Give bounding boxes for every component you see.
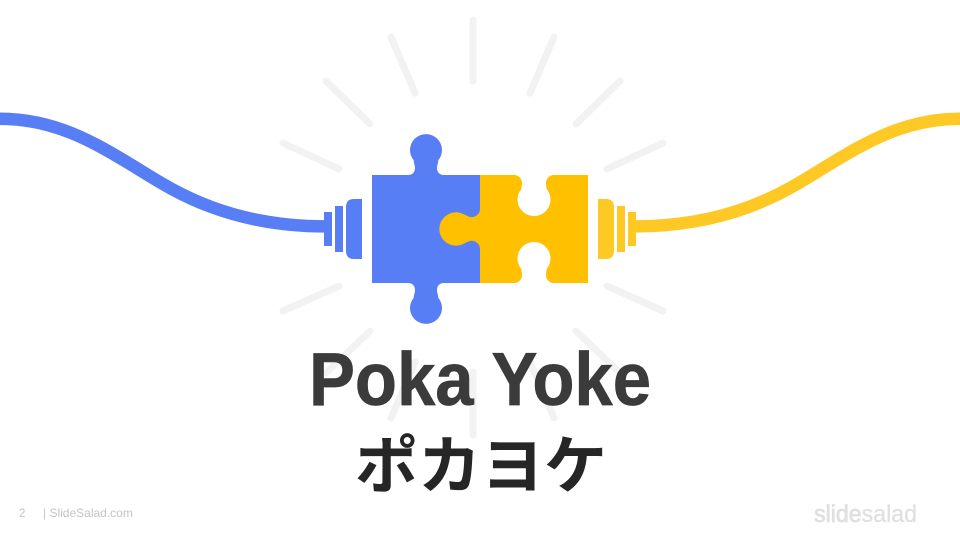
yellow plug [598,199,636,259]
title: katakana: ポカヨケ [355,416,607,507]
page number: 2 [19,508,25,520]
yellow puzzle piece [439,175,588,283]
radiating light rays [283,20,663,435]
title: Poka Yoke: Poka Yoke [309,337,651,421]
footer source: | SlideSalad.com [43,506,133,520]
yellow cable [634,119,960,226]
logo: slidesalad: slidesalad [814,501,917,528]
blue puzzle piece [372,134,480,324]
blue plug [324,199,362,259]
blue cable [0,119,326,226]
